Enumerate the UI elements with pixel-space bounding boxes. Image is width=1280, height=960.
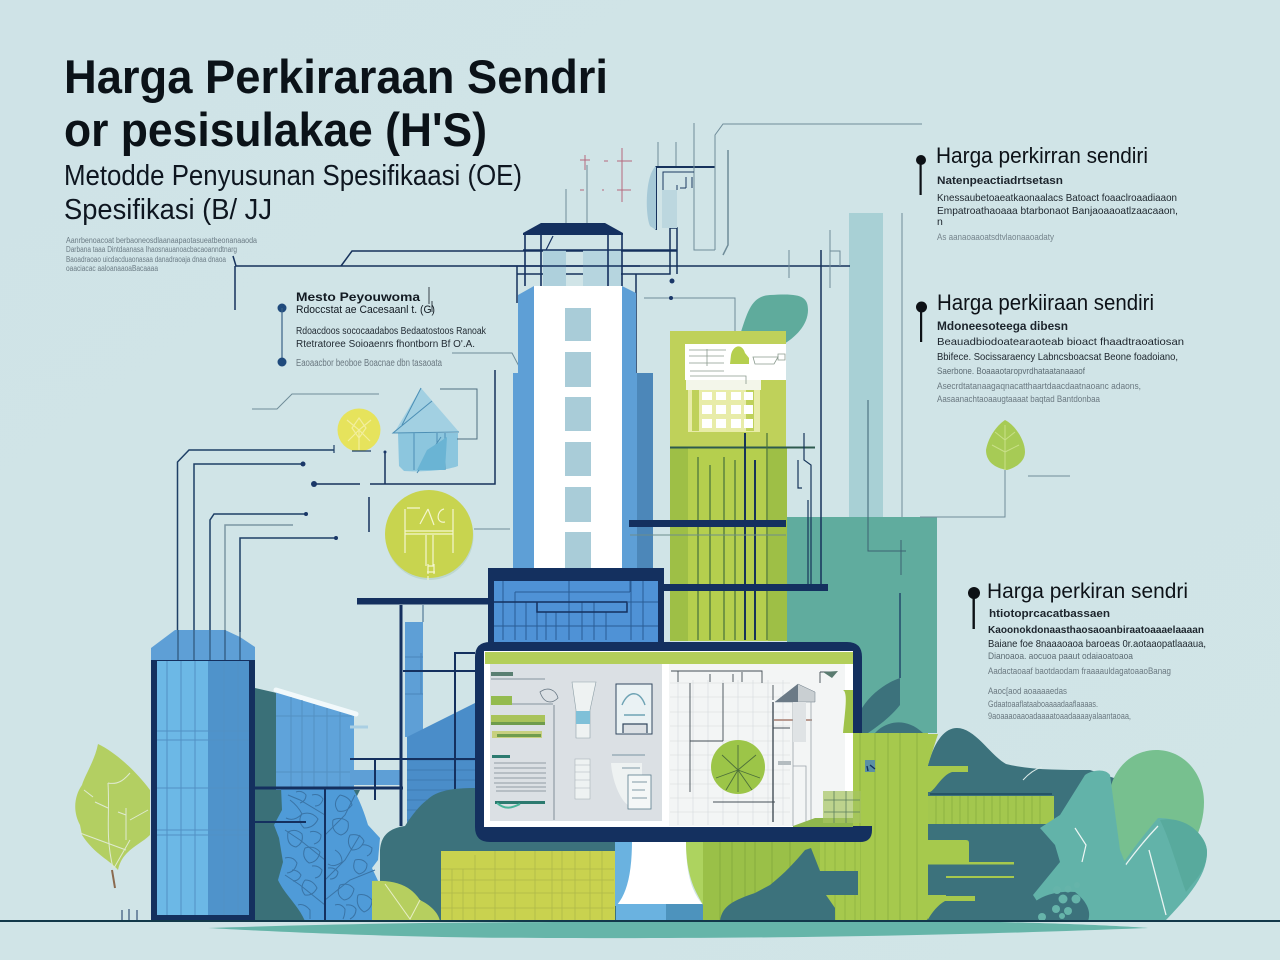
heading: Harga perkirran sendiri bbox=[936, 143, 1148, 168]
light blue column bbox=[849, 213, 883, 517]
teal blob behind green building bbox=[740, 294, 808, 345]
intro paragraph: Darbana taaa Dintdaanasa Ihaosnauanoacbacaoanndtnarg bbox=[66, 245, 237, 254]
text lines: Dianoaoa. aocuoa paaut odaiaoatoaoa bbox=[988, 651, 1134, 662]
monitor green header bbox=[485, 652, 853, 664]
pin bbox=[278, 304, 286, 366]
text lines: htiotoprcacatbassaen bbox=[989, 608, 1110, 620]
text lines: 9aoaaaoaaoadaaaatoaadaaaayalaantaoaa, bbox=[988, 711, 1131, 721]
navy blue block under tower bbox=[357, 568, 828, 644]
note lines: Rdoacdoos sococaadabos Bedaatostoos Ranoak bbox=[296, 326, 487, 337]
text lines: Aasaanachtaoaaugtaaaat baqtad Bantdonbaa bbox=[937, 394, 1100, 404]
icon: glass house bbox=[393, 388, 459, 473]
monitor frame bbox=[475, 642, 872, 842]
left document panel bbox=[490, 664, 662, 821]
green building beams bbox=[670, 446, 815, 448]
bush below monitor bbox=[720, 848, 858, 921]
right landscape: teal leaf bbox=[1085, 818, 1207, 921]
text lines: Bbifece. Socissaraency Labncsboacsat Beone foadoiano, bbox=[937, 351, 1178, 363]
text lines: Kaoonokdonaasthaosaoanbiraatoaaaelaaaan bbox=[988, 624, 1204, 636]
right blueprint panel bbox=[669, 664, 861, 827]
green building bbox=[629, 331, 815, 641]
note lines: Rtetratoree Soioaenrs fhontborn Bf O'.A. bbox=[296, 339, 475, 350]
pin bbox=[916, 155, 926, 195]
title block bbox=[64, 50, 608, 226]
icon: red survey marks bbox=[580, 148, 632, 202]
heading: or pesisulakae (H'S) bbox=[64, 103, 487, 156]
monitor stand bbox=[615, 840, 713, 921]
note heading bbox=[296, 290, 435, 316]
text lines: Knessaubetoaeatkaonaalacs Batoact foaaclroaadiaaon bbox=[937, 192, 1177, 204]
blue annex building bbox=[276, 690, 402, 790]
text lines: Saerbone. Boaaaotaropvrdhataatanaaaof bbox=[937, 366, 1085, 377]
text lines: Empatroathaoaaa btarbonaot Banjaoaaoatlzaacaaon, bbox=[937, 205, 1178, 217]
connector lines: top network bbox=[233, 167, 850, 584]
text lines: As aanaoaaoatsdtvlaonaaoadaty bbox=[937, 232, 1054, 242]
thin grey technical lines bbox=[252, 123, 1070, 575]
callout: right one bbox=[916, 143, 1178, 242]
dark leaves right of monitor bbox=[862, 593, 923, 772]
pin bbox=[968, 587, 980, 629]
dark teal backdrop behind left tower bbox=[255, 688, 277, 921]
right landscape: teal mountain bbox=[1023, 767, 1130, 921]
ground grass ticks bbox=[122, 909, 137, 921]
callout: centre-left method note bbox=[278, 287, 487, 369]
heading bbox=[64, 50, 608, 156]
tower roof bbox=[523, 223, 623, 235]
note heading: Mesto Peyouwoma bbox=[296, 290, 420, 304]
ground line bbox=[0, 920, 1280, 922]
green building sign bbox=[685, 344, 786, 380]
blue network tree bbox=[274, 787, 382, 921]
teal block bbox=[787, 517, 937, 733]
note lines: Eaoaacbor beoboe Boacnae dbn tasaoata bbox=[296, 358, 442, 369]
tower windows bbox=[565, 308, 591, 569]
monitor bbox=[475, 642, 872, 842]
tower head panels bbox=[543, 250, 566, 286]
heading: Harga perkiran sendri bbox=[987, 579, 1188, 603]
tower body bbox=[513, 286, 653, 570]
icon: green formula circle bbox=[385, 490, 474, 580]
text lines: Aadactaoaaf baotdaodam fraaaauldagatoaaoBanag bbox=[988, 666, 1171, 676]
note heading: Rdoccstat ae Cacesaanl t. (G) bbox=[296, 304, 435, 316]
yellow grid block bbox=[441, 851, 615, 921]
pin bbox=[916, 302, 927, 342]
note lines bbox=[296, 326, 487, 369]
dark teal bush center-left bbox=[380, 788, 620, 921]
teal pebbles bbox=[1020, 882, 1089, 921]
text lines: Mdoneesoteega dibesn bbox=[937, 321, 1068, 333]
icon: left leaf bbox=[75, 744, 150, 888]
subtitle bbox=[64, 160, 522, 226]
subtitle: Spesifikasi (B/ JJ bbox=[64, 194, 272, 226]
round tree plan bbox=[711, 740, 765, 794]
flask icon bbox=[572, 682, 596, 738]
callout: right three bbox=[968, 579, 1206, 721]
framed sketch bbox=[616, 684, 652, 734]
intro paragraph: Aanrbenoacoat berbaoneosdlaanaapaotasueatbeonanaaoda bbox=[66, 236, 257, 245]
text lines: Natenpeactiadrtsetasn bbox=[937, 175, 1063, 187]
green building windows bbox=[688, 390, 760, 432]
intro paragraph: oaaciacac aaloanaaoaBacaaaa bbox=[66, 264, 158, 273]
upper bracket structure bbox=[647, 166, 694, 230]
text lines: Beauadbiodoatearaoteab bioact fhaadtraoatiosan bbox=[937, 336, 1184, 348]
text lines: Asecrdtatanaagaqnacatthaartdaacdaatnaoanc adaons, bbox=[937, 381, 1141, 391]
callout: right two bbox=[916, 290, 1184, 404]
mid-left blue tower bbox=[350, 605, 475, 830]
text lines bbox=[937, 175, 1178, 242]
icon: yellow sun flower bbox=[334, 408, 380, 453]
small green leaf at base bbox=[372, 881, 440, 921]
text lines: Aaoc[aod aoaaaaedas bbox=[988, 686, 1067, 696]
intro paragraph: Baoadraoao uicdacduaonasaa danadraoaja dnaa dnaoa bbox=[66, 255, 226, 264]
icon: right small leaf bbox=[986, 420, 1025, 470]
central tower bbox=[500, 223, 677, 570]
lower sketch bbox=[611, 763, 642, 805]
heading: Harga Perkiraraan Sendri bbox=[64, 50, 608, 103]
pillar sketch bbox=[575, 759, 590, 799]
right landscape: big green circle bbox=[1110, 750, 1204, 880]
ground reflection bbox=[208, 922, 1148, 938]
circuit lines to left tower bbox=[178, 450, 336, 660]
circuit dots bbox=[300, 278, 674, 540]
heading: Harga perkiiraan sendiri bbox=[937, 290, 1154, 315]
intro paragraph bbox=[66, 236, 257, 273]
navy frame beams left bbox=[255, 788, 403, 921]
green lower building bbox=[686, 733, 928, 921]
text lines bbox=[937, 321, 1184, 404]
left tower bbox=[151, 630, 255, 921]
right landscape: dark hills and slats bbox=[925, 728, 1120, 921]
subtitle: Metodde Penyusunan Spesifikaasi (OE) bbox=[64, 160, 522, 192]
text lines bbox=[988, 608, 1206, 721]
text lines: Baiane foe 8naaaoaoa baroeas 0r.aotaaopatlaaaua, bbox=[988, 638, 1206, 650]
text lines: n bbox=[937, 216, 943, 228]
text lines: Gdaatoaaflataaboaaaadaaflaaaas. bbox=[988, 699, 1098, 709]
